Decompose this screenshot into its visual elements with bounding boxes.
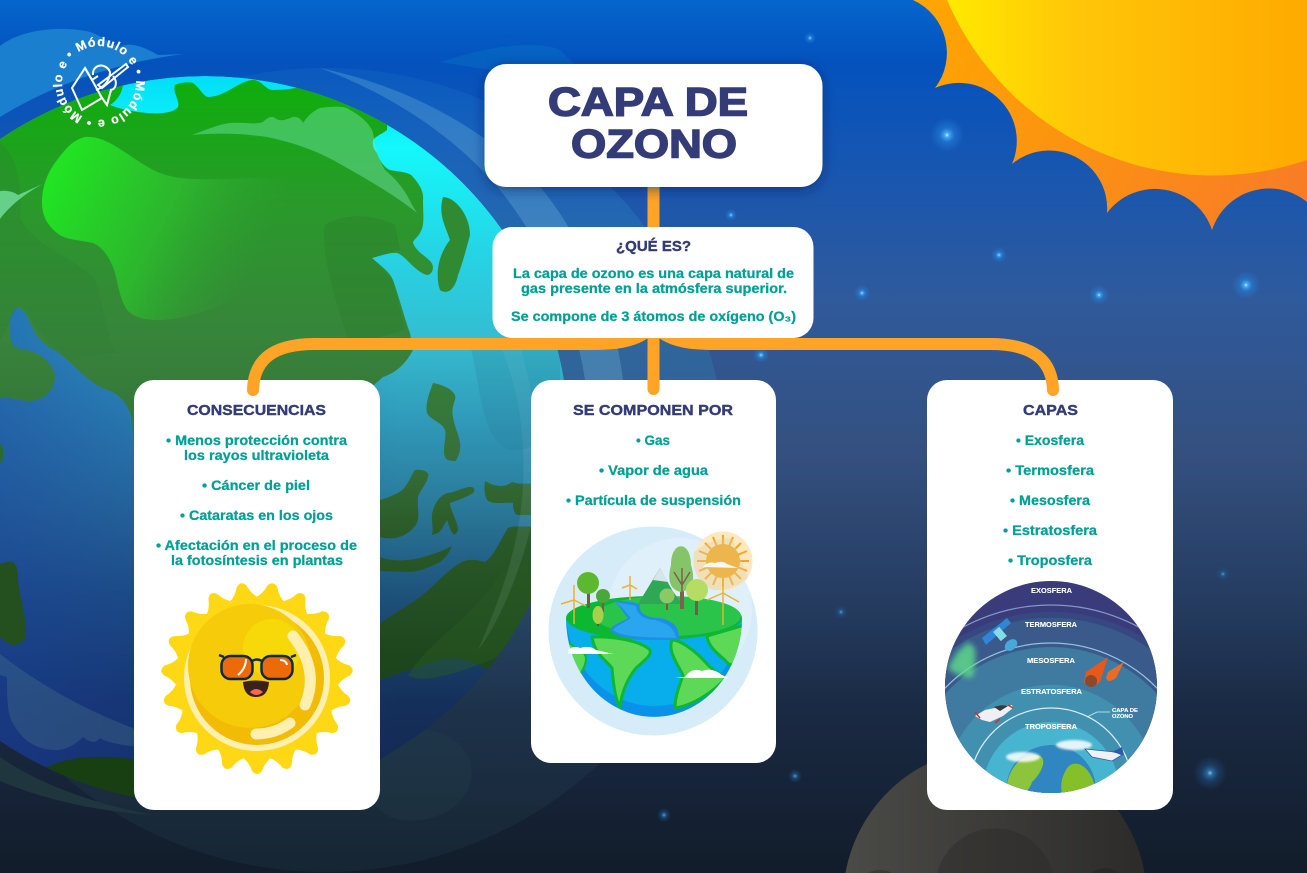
list: capas: • Troposfera — [1008, 553, 1093, 568]
list: capas: • Estratosfera — [1003, 523, 1098, 538]
southern land band — [46, 756, 136, 798]
logo circular text: Módulo e • Módulo e • Módulo e • — [52, 36, 145, 127]
sky sun — [693, 532, 752, 590]
left cloud wisp — [0, 183, 45, 219]
trees — [577, 546, 708, 626]
definition text — [511, 266, 796, 324]
layer labels — [1021, 588, 1139, 731]
definition text: La capa de ozono es una capa natural de — [513, 266, 795, 281]
cloud wisp top-left — [0, 29, 185, 117]
layer labels: MESOSFERA — [1027, 658, 1075, 665]
logo: Módulo e — [52, 36, 145, 127]
globe bowl — [566, 596, 745, 717]
translucent lower cloud — [0, 654, 140, 750]
list: consecuencias: los rayos ultravioleta — [184, 448, 330, 463]
heading: qué es: ¿QUÉ ES? — [616, 238, 691, 255]
layer labels: ESTRATOSFERA — [1021, 689, 1082, 696]
heading: consecuencias: CONSECUENCIAS — [187, 403, 326, 419]
title card: OZONO — [571, 122, 737, 166]
light streak and teal shade — [478, 350, 532, 649]
aurora — [948, 642, 975, 678]
heading: capas: CAPAS — [1023, 403, 1078, 419]
title text: CAPA DE — [548, 80, 748, 124]
connectors: orange lines — [253, 187, 1053, 390]
western strip island — [0, 562, 26, 645]
list: capas — [1003, 433, 1098, 568]
bright land highlight — [42, 136, 230, 320]
list: capas: • Mesosfera — [1010, 493, 1091, 508]
list: consecuencias: • Afectación en el proceso de — [156, 538, 358, 553]
white cloud wisp on land — [192, 107, 417, 213]
jet — [975, 705, 1013, 723]
planet atmosphere halo — [0, 45, 727, 872]
islands — [438, 197, 470, 292]
list: componentes: • Vapor de agua — [599, 463, 709, 478]
main continent — [0, 50, 433, 450]
crescent below planet — [0, 757, 155, 815]
panel: se componen por — [531, 380, 776, 763]
icon: smiling sun with sunglasses — [160, 581, 354, 774]
list: capas: • Termosfera — [1006, 463, 1095, 478]
panel: capas — [927, 380, 1173, 810]
layer labels: EXOSFERA — [1031, 588, 1072, 595]
ocean — [0, 76, 569, 804]
satellite — [982, 618, 1018, 651]
sun in the corner — [913, 0, 1307, 230]
airplane — [1085, 747, 1124, 761]
planet earth — [0, 50, 580, 810]
small ocean patch — [1, 124, 25, 138]
layer labels: CAPA DE — [1112, 708, 1139, 714]
definition text: gas presente en la atmósfera superior. — [521, 281, 787, 296]
ozone leader line — [1087, 712, 1110, 717]
moon at bottom — [845, 748, 1145, 873]
darker western land — [0, 142, 20, 322]
layer labels: TERMOSFERA — [1025, 622, 1077, 629]
list: capas: • Exosfera — [1016, 433, 1085, 448]
title card — [484, 64, 822, 187]
panel: qué es — [492, 227, 814, 338]
darker right land patch — [324, 216, 400, 281]
diagram: atmosphere layers — [945, 581, 1157, 793]
logo icon: book and pencil — [72, 64, 128, 110]
meteors — [1084, 657, 1124, 687]
list: consecuencias — [156, 433, 358, 568]
list: componentes: • Gas — [636, 433, 670, 448]
wind turbines — [561, 576, 739, 625]
definition text: Se compone de 3 átomos de oxígeno (O₃) — [511, 309, 796, 324]
heading: se componen por: SE COMPONEN POR — [573, 403, 734, 419]
earth — [1006, 745, 1096, 793]
illustration: half earth with trees — [548, 526, 758, 736]
list: consecuencias: • Cataratas en los ojos — [180, 508, 333, 523]
layer labels: TROPOSFERA — [1025, 724, 1077, 731]
panel: consecuencias — [134, 380, 380, 810]
list: consecuencias: • Cáncer de piel — [202, 478, 310, 493]
layer labels: OZONO — [1112, 714, 1133, 720]
list: consecuencias: la fotosíntesis en plantas — [171, 553, 343, 568]
large southern land — [380, 526, 531, 680]
stars — [657, 32, 1260, 822]
mountains — [638, 568, 682, 604]
clouds — [1006, 740, 1092, 762]
list: consecuencias: • Menos protección contra — [166, 433, 348, 448]
list: componentes — [566, 433, 741, 508]
clouds — [568, 647, 613, 654]
list: componentes: • Partícula de suspensión — [566, 493, 741, 508]
